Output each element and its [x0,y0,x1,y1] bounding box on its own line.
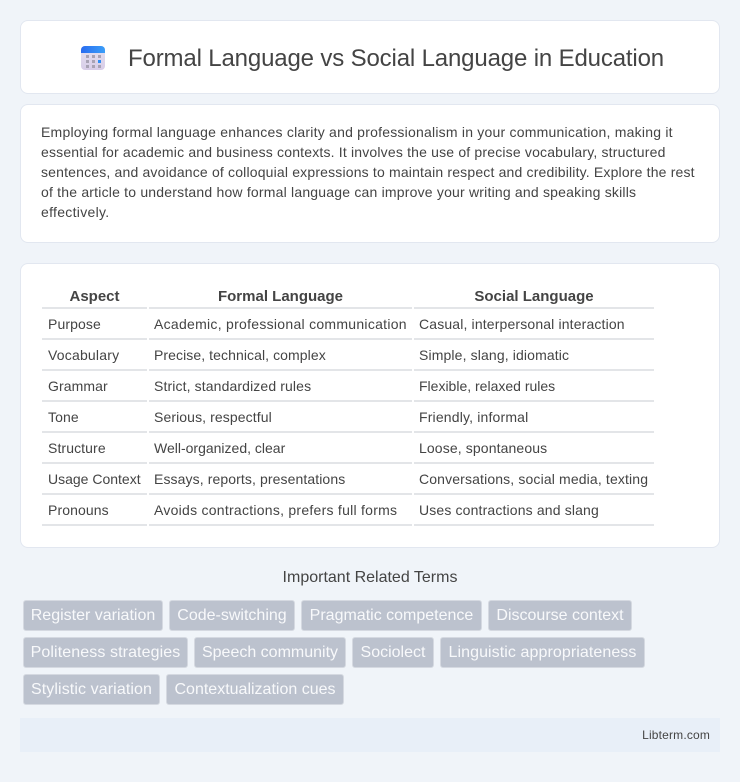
row: usage context: Conversations, social media, texting [419,471,648,487]
tag [166,674,344,705]
tag [440,637,645,668]
row: tone [48,409,528,425]
row: vocabulary [48,347,569,363]
footer [20,718,720,752]
row: grammar: Grammar [48,378,108,394]
tag [301,600,482,631]
tag: Speech community [202,644,338,661]
tag: Contextualization cues [174,681,335,698]
row: grammar [48,378,555,394]
icon: calendar [81,46,105,70]
tag: Linguistic appropriateness [448,644,636,661]
tag: Stylistic variation [31,681,152,698]
row: structure: Well-organized, clear [154,440,285,456]
tag [352,637,434,668]
tag [23,674,160,705]
row: pronouns: Uses contractions and slang [419,502,599,518]
row: purpose: Academic, professional communication [154,316,407,332]
tag [488,600,632,631]
text block: introduction: effectively. [41,204,109,220]
related terms tags [23,600,645,705]
row: vocabulary: Simple, slang, idiomatic [419,347,569,363]
text block: introduction [41,124,695,220]
row: usage context [48,471,648,487]
tag: Sociolect [361,644,425,661]
text block: introduction: Employing formal language enhances clarity and professionalism in your communication, making it [41,124,673,140]
row: purpose: Purpose [48,316,101,332]
row: vocabulary: Precise, technical, complex [154,347,326,363]
table header: Formal Language [218,288,343,305]
panel: introduction [20,104,720,243]
tag: Code-switching [177,607,287,624]
tag [169,600,295,631]
tag [23,600,163,631]
row: grammar: Flexible, relaxed rules [419,378,555,394]
row: purpose: Casual, interpersonal interaction [419,316,625,332]
row: pronouns: Pronouns [48,502,109,518]
row: usage context: Essays, reports, presentations [154,471,345,487]
row: purpose [48,316,625,332]
tag: Pragmatic competence [310,607,473,624]
tag [194,637,346,668]
row: pronouns: Avoids contractions, prefers full forms [154,502,397,518]
row: tone: Tone [48,409,79,425]
row: pronouns [48,502,599,518]
title: Formal Language vs Social Language in Education [128,45,664,72]
row: grammar: Strict, standardized rules [154,378,311,394]
panel: comparison table [20,263,720,548]
tag: Politeness strategies [31,644,180,661]
comparison table [42,288,654,526]
row: structure [48,440,547,456]
row: tone: Friendly, informal [419,409,528,425]
table header: Social Language [474,288,594,305]
row: tone: Serious, respectful [154,409,272,425]
heading: important related terms: Important Related Terms [283,569,457,586]
text block: introduction: sentences, and avoidance of colloquial expressions to maintain respect and credibility. Explore the rest [41,164,695,180]
row: vocabulary: Vocabulary [48,347,119,363]
table header [69,288,594,305]
text block: introduction: of the article to understand how formal language can improve your writing and speaking skills [41,184,636,200]
tag: Register variation [31,607,155,624]
row: usage context: Usage Context [48,471,141,487]
table header: Aspect [69,288,120,305]
row: structure: Structure [48,440,106,456]
tag: Discourse context [496,607,624,624]
tag [23,637,188,668]
footer credit: Libterm.com [642,728,710,742]
panel: title card [20,20,720,94]
text block: introduction: essential for academic and business contexts. It involves the use of precise vocabulary, structured [41,144,666,160]
row: structure: Loose, spontaneous [419,440,547,456]
